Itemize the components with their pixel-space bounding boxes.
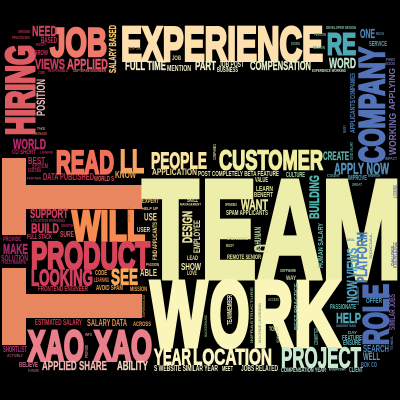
small words inside E of TEAM: OPEN SOURCE xyxy=(227,236,248,241)
small words inside EXPERIENCE: EXPERIENCE WORKING xyxy=(312,68,346,73)
word: WORD: WORD xyxy=(329,56,356,72)
word cloud: LEARNING xyxy=(94,278,109,284)
small words beside APPLY NOW: COMPANIES xyxy=(212,144,217,160)
small words beside APPLY NOW: GOOD SALARY xyxy=(349,142,354,160)
word: PLATFORM: PLATFORM xyxy=(354,232,371,283)
word: FULL TIME: FULL TIME xyxy=(125,58,166,73)
small words inside WORK: INFRASTRUCTURE xyxy=(250,286,254,343)
small words inside E of TEAM: U xyxy=(249,244,271,253)
small words near USE: EXPERIENCED xyxy=(142,295,146,317)
word: CREATE: CREATE xyxy=(323,151,349,163)
word: RE: RE xyxy=(327,26,356,62)
word: CUSTOMER: CUSTOMER xyxy=(219,144,323,176)
small words inside WORK: MACHINE LEARNING xyxy=(258,303,262,343)
word: LL: LL xyxy=(120,144,144,180)
small words beside READ: CO SHORT xyxy=(12,149,36,156)
word: USE: USE xyxy=(144,212,157,224)
small words around ROLE: DEAL xyxy=(347,237,355,242)
small words, far right xyxy=(342,57,399,268)
small words near XAO: PROVIDE xyxy=(84,345,89,358)
word: BUILD: BUILD xyxy=(31,220,59,236)
word: TEAM: T xyxy=(142,150,199,308)
small words, top left: PROCESSES xyxy=(12,35,30,40)
word: ROLE: ROLE xyxy=(357,284,396,345)
small words around ROLE: TECHNICAL xyxy=(389,336,394,350)
small words, top left xyxy=(12,29,107,136)
small words inside WORK: WAY xyxy=(286,276,296,282)
small words, far right: FIND xyxy=(386,57,395,62)
word: SEE: SEE xyxy=(111,264,138,290)
word: ONE: ONE xyxy=(360,26,375,41)
word: ENSURE: ENSURE xyxy=(343,340,361,347)
small words inside E of TEAM: SE HUMAN xyxy=(253,227,263,252)
small words beside APPLY NOW: GREAT xyxy=(352,182,362,187)
small words, top left: SOFTWARE ENGINEER xyxy=(73,68,107,73)
small words around ROLE: COLLABORATE xyxy=(355,287,360,305)
word: LEARN: LEARN xyxy=(256,186,273,193)
word: PROVIDE: PROVIDE xyxy=(3,237,21,243)
word: SPAM APPLICANTS: SPAM APPLICANTS xyxy=(226,210,268,217)
word: SIMILAR JOBS: SIMILAR JOBS xyxy=(387,294,397,330)
small words inside EXPERIENCE xyxy=(128,25,384,73)
word: WORK: O xyxy=(210,262,250,366)
word: TEAM: A xyxy=(257,150,323,308)
word: PRODUCT: PRODUCT xyxy=(31,236,150,278)
word: APPLYING: APPLYING xyxy=(388,68,397,110)
small words around ROLE: UNDERSTAND xyxy=(336,323,356,328)
small words inside WORK: COMMITTED xyxy=(314,328,320,345)
word: BELIEVE: BELIEVE xyxy=(19,362,38,369)
word: CLIENT: CLIENT xyxy=(349,367,363,374)
word: APPLIED: APPLIED xyxy=(67,57,108,73)
word: TEAM xyxy=(142,150,400,308)
word: ACROSS: ACROSS xyxy=(133,322,151,328)
small words near BUILD: GROWTH xyxy=(61,223,73,228)
small words near BUILD xyxy=(3,218,73,265)
small words inside EXPERIENCE: TOP 1% xyxy=(128,46,141,51)
small words beside APPLY NOW: ENVIRON xyxy=(368,173,380,178)
word: PEOPLE: PEOPLE xyxy=(151,148,207,174)
word: WORK: W xyxy=(150,262,207,366)
word: SOLUTION: SOLUTION xyxy=(1,253,28,263)
small words, far right: GOOD xyxy=(385,61,395,66)
word: IMPROVE: IMPROVE xyxy=(348,175,367,182)
small words, top left: MANAGE xyxy=(35,131,47,136)
word: SALARY DATA: SALARY DATA xyxy=(87,318,127,329)
small words inside T of TEAM: LEAD xyxy=(187,256,198,262)
word: PASSIONATE: PASSIONATE xyxy=(330,304,356,311)
small words, far right: LOOKING xyxy=(393,185,399,198)
small words beside READ xyxy=(12,149,53,180)
word: WILL: WILL xyxy=(72,202,145,250)
small words inside EXPERIENCE: MILLION xyxy=(313,45,325,50)
word: FRONTEND ENGINEER: FRONTEND ENGINEER xyxy=(38,286,88,293)
word: SURE: SURE xyxy=(60,229,74,239)
word: BOK CO: BOK CO xyxy=(361,362,377,369)
word: FULL STACK: FULL STACK xyxy=(27,234,52,241)
small words, top left: TAKE xyxy=(37,126,45,131)
small words inside T of TEAM: MANAGEMENT xyxy=(180,202,202,206)
word: JOB: JOB xyxy=(50,21,107,65)
word: FIND APPLICANTS: FIND APPLICANTS xyxy=(152,222,159,260)
small words inside EXPERIENCE: PERSON xyxy=(314,32,326,37)
word: BASED: BASED xyxy=(41,35,57,45)
word: SHORTLIST: SHORTLIST xyxy=(3,345,27,354)
word: WORLD S: WORLD S xyxy=(94,176,114,183)
small words inside T of TEAM xyxy=(180,198,202,277)
word: VIEWS: VIEWS xyxy=(35,57,65,73)
small words around ROLE xyxy=(336,232,394,350)
word: LOCATION: LOCATION xyxy=(193,344,272,370)
word: MEET: MEET xyxy=(222,366,233,373)
small words, top left: RESPONSIBLE xyxy=(48,68,68,73)
small words inside WORK: ACCESS xyxy=(268,297,279,302)
word: S WEBSITE SIMILAR YEAR: S WEBSITE SIMILAR YEAR xyxy=(154,364,218,373)
word: DATA PUBLISHED: DATA PUBLISHED xyxy=(43,172,94,183)
word: COMPENSATION YEAR: COMPENSATION YEAR xyxy=(281,367,326,374)
small words beside READ: BEST xyxy=(28,156,45,167)
small words inside WORK xyxy=(204,268,320,345)
small words beside READ: SYSTEM xyxy=(32,164,48,170)
word: KNOW: KNOW xyxy=(115,170,136,181)
small words near XAO: ACTIVELY xyxy=(7,353,23,358)
word: XAO (left): XAO xyxy=(28,322,84,370)
word: DAY: DAY xyxy=(348,330,357,335)
word: PART: PART xyxy=(195,58,216,73)
word: BUSINESS: BUSINESS xyxy=(217,65,238,74)
word: OFFER: OFFER xyxy=(366,298,382,305)
word: CULTURE: CULTURE xyxy=(286,172,305,179)
word: EMPLOYEE: EMPLOYEE xyxy=(192,220,202,253)
word: XAO (right): XAO xyxy=(94,322,152,370)
small words inside WORK: TOOL xyxy=(269,326,279,333)
word: WELL: WELL xyxy=(363,351,380,363)
word: WANT: WANT xyxy=(241,198,268,214)
word: COMPENSATION: COMPENSATION xyxy=(250,58,311,73)
small words beside READ: PARTNER xyxy=(27,176,41,180)
small words inside T of TEAM: LOVE xyxy=(187,271,197,277)
small words inside E of TEAM: BUSY xyxy=(226,243,234,248)
small words near XAO: FUTURE xyxy=(28,368,39,373)
small words, far right: KNOWLEDGE xyxy=(393,241,399,268)
small words, far right: CHALLENGE xyxy=(390,246,395,266)
word: ABILITY: ABILITY xyxy=(117,358,148,373)
large orange T shape, top xyxy=(2,158,142,235)
small words near USE: HELP UP xyxy=(142,206,158,211)
word: POST COMPLETELY BETA FEATURE: POST COMPLETELY BETA FEATURE xyxy=(198,171,279,178)
small words inside WORK: SOFTWARE xyxy=(280,268,296,273)
word: EVERYDAY: EVERYDAY xyxy=(329,366,346,372)
word: NEED: NEED xyxy=(32,24,57,40)
word: APPLICATION: APPLICATION xyxy=(152,167,197,177)
small words beside APPLY NOW: COUNT xyxy=(327,173,340,178)
word: GROW: GROW xyxy=(34,48,48,57)
small words inside WORK: BEST PRACTICE xyxy=(294,282,300,330)
small words beside READ: EXISTING xyxy=(28,168,41,174)
small words inside E of TEAM xyxy=(225,202,271,261)
word: COMPANIES: COMPANIES xyxy=(350,73,357,99)
small words, top left: CORE xyxy=(38,70,45,75)
word: USER: USER xyxy=(137,227,150,234)
small words, top left: GROUND xyxy=(18,29,30,34)
word: HUMAN SALARY: HUMAN SALARY xyxy=(318,223,325,268)
word: ABLE: ABLE xyxy=(140,268,157,279)
word: MENTION: MENTION xyxy=(167,63,191,73)
word: AVOID SPAM: AVOID SPAM xyxy=(96,285,123,292)
small words inside E of TEAM: REMOTE SENIOR xyxy=(227,254,261,261)
small words, top left: ROCKY xyxy=(36,42,46,47)
word: NOW VIEWS: NOW VIEWS xyxy=(344,248,361,303)
word: VALUE: VALUE xyxy=(255,177,268,184)
word: ESTIMATED SALARY: ESTIMATED SALARY xyxy=(35,317,82,327)
small words near USE: BENEFITS xyxy=(126,207,131,222)
word: WORLD: WORLD xyxy=(13,137,46,153)
word: WORKING: WORKING xyxy=(388,113,399,155)
word: BENEFIT: BENEFIT xyxy=(254,192,273,199)
small words near XAO xyxy=(7,332,92,373)
small words around ROLE: SOCIAL xyxy=(368,232,373,259)
small words near BUILD: FULLY REMOTE xyxy=(3,260,26,265)
small words inside EXPERIENCE: DOING xyxy=(291,41,300,46)
small words inside E of TEAM: SPENDING xyxy=(225,202,237,207)
small words inside EXPERIENCE: DEVELOPER DESIGN xyxy=(326,25,356,30)
small words near USE: EXPERT xyxy=(142,199,159,205)
small words near USE xyxy=(126,199,159,317)
word: MISSION: MISSION xyxy=(130,287,147,293)
small words near USE: PASSION xyxy=(146,262,159,267)
small words inside T of TEAM: SKILL xyxy=(187,198,198,204)
word: DESIGN: DESIGN xyxy=(179,211,195,243)
small words inside WORK: BACKGROUND xyxy=(204,315,208,337)
word: TEAMMEMBER: TEAMMEMBER xyxy=(227,295,234,325)
word: BUILDING: BUILDING xyxy=(306,175,322,219)
word: TEAM: E xyxy=(201,150,257,308)
word: WORK: K xyxy=(294,262,340,366)
word: LOOKING: LOOKING xyxy=(31,264,93,290)
word: SERVICE: SERVICE xyxy=(369,39,387,48)
word: JOBS RELATED: JOBS RELATED xyxy=(241,364,278,373)
large orange T shape, bottom xyxy=(2,268,142,345)
word: APPLIED SHARE: APPLIED SHARE xyxy=(42,358,107,373)
word: JOB POST: JOB POST xyxy=(219,59,244,69)
word: APPLICANTS: APPLICANTS xyxy=(350,100,357,133)
word: MAKE: MAKE xyxy=(3,242,28,258)
small words inside EXPERIENCE: MUCH xyxy=(376,31,384,36)
word: YEAR: YEAR xyxy=(154,344,191,370)
word: POSITION: POSITION xyxy=(34,79,48,116)
word: SHOW: SHOW xyxy=(181,262,201,273)
word: HELP: HELP xyxy=(336,311,361,327)
small words inside EXPERIENCE: JOB xyxy=(172,56,181,62)
small words, far right: MANY xyxy=(342,125,347,133)
small words beside APPLY NOW xyxy=(212,142,380,187)
word: CODE: CODE xyxy=(95,270,107,277)
word: SUPPORT: SUPPORT xyxy=(30,206,68,221)
word: FEATURE: FEATURE xyxy=(342,335,362,342)
small words beside READ: LEGEND xyxy=(40,150,53,154)
word: READ: READ xyxy=(56,144,114,180)
small words near XAO: INFO xyxy=(85,332,92,337)
small words near BUILD: LOCATION WORKING xyxy=(31,218,65,223)
word: WORK xyxy=(150,262,340,366)
small words inside WORK: DON T xyxy=(276,332,280,343)
word: WORK: R xyxy=(252,262,293,366)
